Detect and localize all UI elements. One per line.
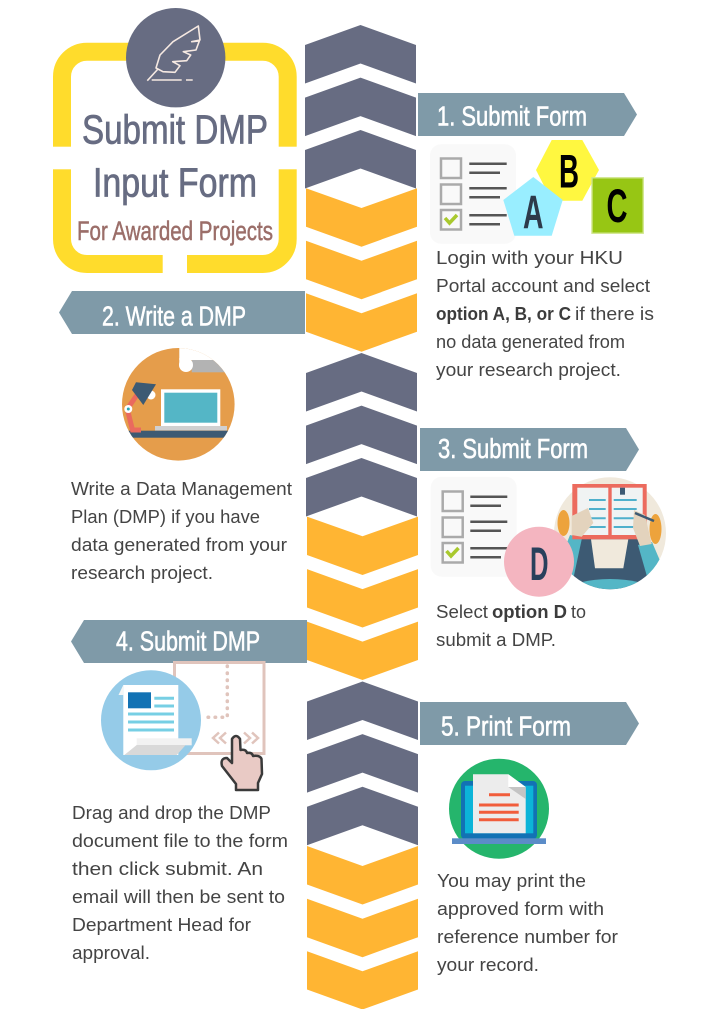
icon: feather bbox=[126, 8, 225, 107]
banner: step 4: 4. Submit DMP bbox=[116, 626, 260, 656]
banner: step 5 bbox=[420, 702, 639, 745]
icon: drag and drop document bbox=[101, 662, 264, 790]
text: step 5 bbox=[437, 870, 618, 975]
text: step 4: approval. bbox=[72, 942, 150, 963]
banner: step 1: 1. Submit Form bbox=[437, 100, 587, 132]
text: step 2: research project. bbox=[71, 562, 213, 583]
icon: form checklist with options A B C: B bbox=[559, 144, 579, 198]
text: step 1: option A, B, or C bbox=[436, 303, 571, 324]
text: step 1: your research project. bbox=[436, 359, 621, 380]
banner: step 3 bbox=[420, 428, 639, 471]
icon: form checklist with options A B C: A bbox=[523, 186, 544, 238]
banner: step 2 bbox=[59, 291, 305, 334]
text: step 4 bbox=[72, 802, 288, 963]
text: step 2: Write a Data Management bbox=[71, 478, 292, 499]
text: step 4: then click submit. An bbox=[72, 858, 263, 879]
text: step 1: if there is bbox=[575, 303, 654, 324]
banner: step 3: 3. Submit Form bbox=[438, 433, 588, 464]
banner: step 4 bbox=[71, 620, 307, 663]
icon: laptop with printed form bbox=[449, 759, 549, 859]
text: step 3: submit a DMP. bbox=[436, 629, 556, 650]
title frame bbox=[48, 52, 302, 278]
icon: form checklist with options A B C bbox=[430, 140, 643, 244]
title: Submit DMP bbox=[82, 106, 268, 152]
text: step 5: reference number for bbox=[437, 926, 618, 947]
text: step 2: Plan (DMP) if you have bbox=[71, 506, 260, 527]
icon: desk with laptop and lamp bbox=[120, 346, 240, 461]
text: step 4: email will then be sent to bbox=[72, 886, 285, 907]
title: Input Form bbox=[93, 160, 257, 206]
text: step 1: Login with your HKU bbox=[436, 247, 623, 268]
banner: step 1 bbox=[418, 93, 637, 136]
banner: step 2: 2. Write a DMP bbox=[102, 300, 246, 332]
banner: step 5: 5. Print Form bbox=[441, 710, 571, 742]
title bbox=[77, 106, 273, 246]
text: step 2 bbox=[71, 478, 292, 583]
icon: form checklist with person reading and option D bbox=[431, 477, 666, 601]
icon: form checklist with options A B C: C bbox=[606, 179, 628, 232]
text: step 4: Drag and drop the DMP bbox=[72, 802, 271, 823]
text: step 2: data generated from your bbox=[71, 534, 287, 555]
text: step 4: Department Head for bbox=[72, 914, 251, 935]
text: step 1: Portal account and select bbox=[436, 275, 650, 296]
text: step 3 bbox=[436, 601, 586, 650]
text: step 1: no data generated from bbox=[436, 331, 625, 352]
text: step 3: option D bbox=[492, 601, 567, 622]
center chevron column bbox=[305, 25, 418, 1009]
text: step 4: document file to the form bbox=[72, 830, 288, 851]
text: step 5: your record. bbox=[437, 954, 539, 975]
text: step 3: to bbox=[571, 601, 586, 622]
text: step 1 bbox=[436, 247, 654, 380]
icon: form checklist with person reading and option D: D bbox=[530, 537, 548, 590]
text: step 5: approved form with bbox=[437, 898, 604, 919]
text: step 3: Select bbox=[436, 601, 488, 622]
text: step 5: You may print the bbox=[437, 870, 586, 891]
title: For Awarded Projects bbox=[77, 216, 273, 246]
